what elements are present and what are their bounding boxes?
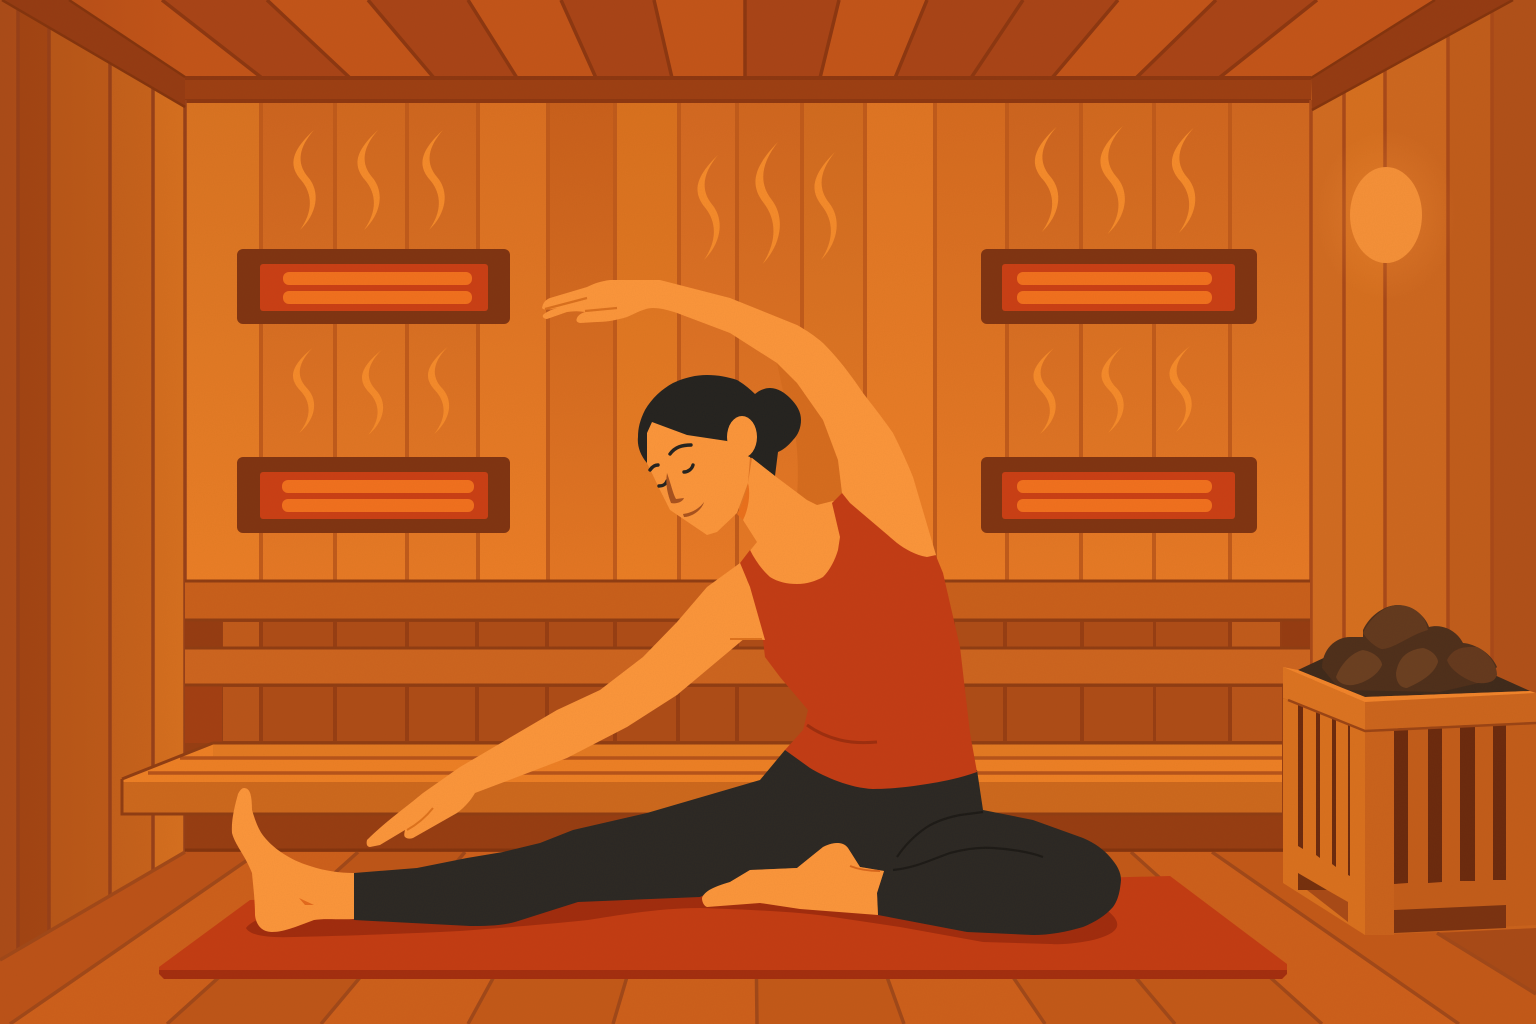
- heat waves: [293, 126, 1195, 435]
- woman stretching: [232, 280, 1121, 935]
- stones: [1298, 605, 1530, 697]
- extended foot: [232, 788, 354, 932]
- neck and chest: [740, 458, 845, 590]
- tucked foot: [702, 843, 884, 915]
- neck shadow: [737, 483, 749, 520]
- back wall panels: [185, 100, 1310, 600]
- face: [647, 422, 750, 535]
- back benches: [185, 580, 1310, 850]
- leggings: [354, 750, 1121, 935]
- ear: [727, 416, 757, 458]
- left wall: [0, 0, 185, 960]
- front bench seat: [122, 743, 1290, 852]
- front arm: [367, 563, 765, 847]
- raised arm: [542, 280, 936, 557]
- crate: [1283, 667, 1536, 935]
- right wall: [1311, 0, 1536, 1000]
- wall lamp: [1316, 130, 1456, 300]
- ceiling planks: [0, 0, 1536, 78]
- raised arm shadow: [777, 363, 842, 505]
- ceiling beam: [185, 76, 1311, 103]
- tank top: [740, 493, 977, 789]
- sauna stones heater: [1283, 605, 1536, 935]
- yoga mat: [159, 876, 1287, 979]
- nose and mouth: [666, 473, 704, 517]
- hair: [638, 375, 801, 476]
- infrared heater panels: [237, 249, 1257, 533]
- floor planks: [0, 852, 1536, 1024]
- eyes and brows: [650, 445, 693, 486]
- corner beams: [2, 0, 1513, 110]
